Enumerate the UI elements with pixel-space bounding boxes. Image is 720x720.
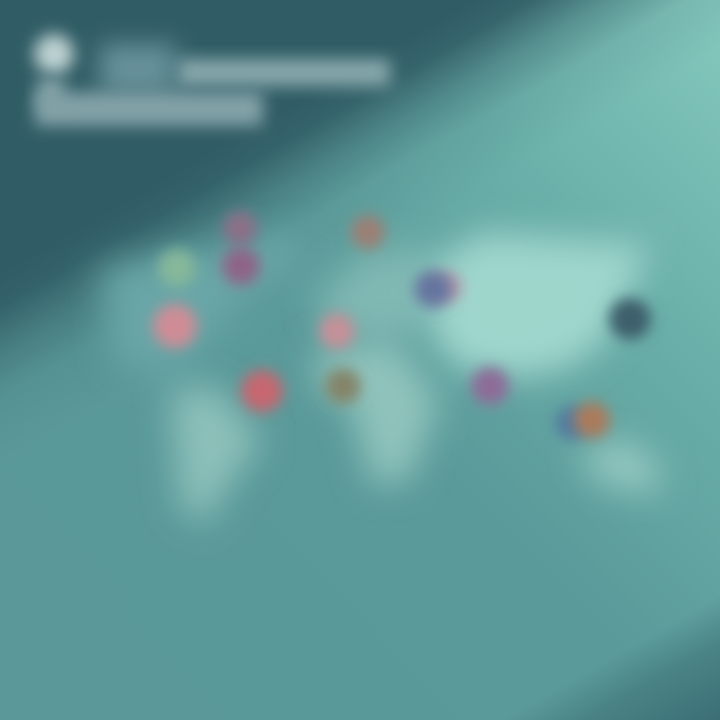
continent: North America — [100, 235, 310, 375]
marker: purple north lower — [222, 247, 260, 285]
marker: pink centre — [319, 313, 355, 349]
continent: Asia — [425, 232, 650, 378]
marker: blue and pink — [414, 270, 462, 308]
marker: dark navy — [609, 298, 651, 340]
marker: red — [241, 370, 283, 412]
continent: South America — [170, 385, 262, 525]
marker: olive — [325, 368, 361, 404]
continent: Africa — [315, 340, 440, 485]
marker: purple north top — [223, 211, 257, 245]
marker: orange-red north — [351, 215, 385, 249]
marker: blue and orange — [555, 402, 610, 440]
header icon — [34, 34, 74, 74]
continent: Europe — [315, 250, 435, 340]
marker: violet — [471, 367, 509, 405]
marker: green — [158, 249, 196, 287]
continent: Australia — [580, 440, 662, 495]
map markers — [153, 211, 651, 440]
title text block (illegible in the blurred reference) — [35, 44, 390, 126]
world map — [100, 232, 662, 525]
marker: pink west — [153, 304, 197, 348]
